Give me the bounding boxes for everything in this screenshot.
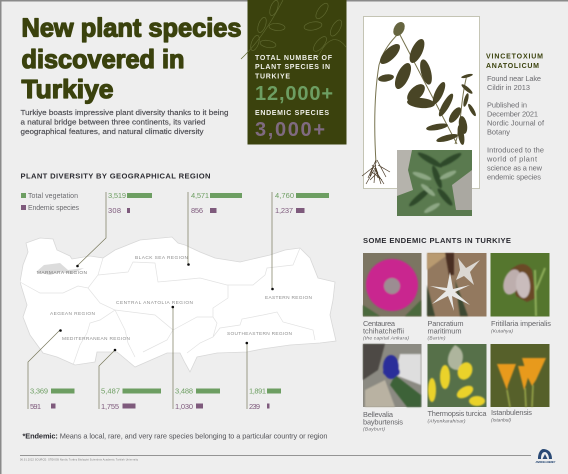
species facts bbox=[486, 74, 545, 182]
caption: Bellevalia bbox=[363, 410, 403, 432]
species facts: Nordic Journal of bbox=[487, 118, 545, 128]
bars: Marmara: 308 bbox=[108, 206, 121, 215]
stat: endemic species: 3,000+ bbox=[255, 119, 325, 141]
stat: total species: 12,000+ bbox=[255, 83, 333, 105]
caption: Istanbulensis bbox=[491, 408, 532, 424]
species facts: Found near Lake bbox=[487, 74, 541, 83]
Marmara sea bbox=[36, 263, 84, 275]
region labels: BLACK SEA REGION bbox=[135, 255, 189, 261]
bars: Mediterranean: 1,755 bbox=[101, 402, 119, 411]
region labels: MEDITERRANEAN REGION bbox=[62, 336, 131, 342]
bars: Southeastern: 1,891 bbox=[249, 386, 266, 396]
caption: Thermopsis: Thermopsis turcica bbox=[428, 409, 487, 418]
caption: Thermopsis: (Afyonkarahisar) bbox=[428, 418, 466, 424]
bars: Mediterranean: 5,487 bbox=[101, 386, 120, 396]
species name: ANATOLICUM bbox=[486, 63, 539, 70]
bars: Aegean bbox=[30, 386, 74, 411]
title bbox=[22, 12, 242, 104]
region labels: CENTRAL ANATOLIA REGION bbox=[116, 300, 194, 306]
region labels bbox=[37, 255, 313, 342]
title: discovered in bbox=[22, 44, 184, 74]
caption: Bellevalia: (Bayburt) bbox=[363, 426, 385, 432]
heading: endemic plants: SOME ENDEMIC PLANTS IN TURKIYE bbox=[363, 236, 511, 245]
heading: plant diversity: PLANT DIVERSITY BY GEOGRAPHICAL REGION bbox=[20, 172, 210, 180]
caption: Pancratium: (Bartin) bbox=[428, 336, 446, 342]
caption: Centaurea bbox=[363, 319, 409, 342]
bars: Aegean: 3,369 bbox=[30, 386, 48, 396]
caption: Centaurea: tchihatcheffii bbox=[363, 326, 404, 336]
icon: leaf branches bbox=[241, 0, 346, 59]
caption: Pancratium bbox=[428, 319, 464, 342]
species facts: Published in bbox=[487, 100, 527, 110]
bars: Eastern: 1,237 bbox=[275, 206, 293, 215]
bars: Black Sea: 4,571 bbox=[191, 191, 209, 200]
icon: agency logo: ANADOLU AGENCY bbox=[536, 460, 556, 464]
caption: Fritillaria bbox=[491, 319, 551, 334]
caption: Fritillaria: Fritillaria imperialis bbox=[491, 319, 551, 328]
legend: Total vegetation bbox=[28, 193, 78, 200]
icon: agency logo bbox=[536, 449, 556, 464]
bars: Eastern: 4,760 bbox=[275, 191, 294, 200]
intro text: geographical features, and natural climatic diversity bbox=[20, 127, 204, 136]
specimen plant bbox=[362, 20, 477, 184]
caption: Thermopsis bbox=[428, 409, 487, 424]
intro text: Turkiye boasts impressive plant diversity thanks to it being bbox=[20, 108, 228, 117]
bars: Southeastern bbox=[249, 386, 281, 411]
stat: total species: PLANT SPECIES IN bbox=[255, 64, 330, 71]
species name bbox=[486, 54, 543, 70]
species facts: December 2021 bbox=[487, 110, 538, 118]
legend: Endemic species bbox=[28, 205, 80, 212]
intro text bbox=[20, 108, 228, 136]
species facts: endemic species bbox=[487, 172, 541, 182]
photo: Fritillaria bbox=[490, 253, 550, 316]
footnote: *Endemic: Means a local, rare, and very rare species belonging to a particular country or region bbox=[22, 432, 328, 440]
bars: Aegean: 591 bbox=[30, 402, 41, 411]
source text: 06.01.2022 SOURCE: STEKOB Nordic Turkey Biologist Scientists Academic Turkish University bbox=[20, 458, 139, 462]
bars: Central Anatolia: 1,030 bbox=[175, 402, 193, 411]
species facts: Introduced to the bbox=[487, 146, 544, 154]
photo: Bellevalia bbox=[363, 344, 422, 407]
region labels: AEGEAN REGION bbox=[50, 311, 96, 317]
region labels: SOUTHEASTERN REGION bbox=[227, 331, 293, 337]
bars: Central Anatolia: 3,488 bbox=[175, 386, 193, 396]
leader lines and dots bbox=[28, 192, 274, 409]
caption: Bellevalia: Bellevalia bbox=[363, 410, 394, 419]
species facts: world of plant bbox=[486, 154, 537, 164]
species facts: science as a new bbox=[487, 164, 543, 172]
bars: Central Anatolia bbox=[175, 386, 220, 411]
stats panel bbox=[241, 0, 346, 145]
caption: Pancratium: Pancratium bbox=[428, 319, 464, 328]
region labels: EASTERN REGION bbox=[265, 295, 313, 301]
caption: Centaurea: Centaurea bbox=[363, 319, 396, 328]
bars: Eastern bbox=[275, 191, 329, 215]
caption: Pancratium: maritimum bbox=[428, 326, 462, 336]
caption: Centaurea: (the capital Ankara) bbox=[363, 336, 409, 342]
bars: Marmara: 3,519 bbox=[108, 191, 126, 200]
bars: Southeastern: 239 bbox=[249, 402, 260, 411]
map: regions of Turkiye bbox=[20, 237, 336, 372]
stat: endemic species: ENDEMIC SPECIES bbox=[255, 110, 329, 117]
bars: Marmara bbox=[108, 191, 152, 215]
caption: Fritillaria: (Kutahya) bbox=[491, 328, 513, 334]
stat: total species bbox=[255, 55, 333, 105]
region labels: MARMARA REGION bbox=[37, 270, 88, 276]
caption: Istanbulensis: Istanbulensis bbox=[491, 408, 532, 417]
species facts: Botany bbox=[487, 128, 510, 136]
legend bbox=[21, 193, 80, 212]
stat: total species: TURKIYE bbox=[255, 74, 290, 80]
stat: total species: TOTAL NUMBER OF bbox=[255, 55, 333, 62]
specimen photo bbox=[397, 150, 472, 216]
panel: vincetoxicum specimen bbox=[362, 16, 545, 216]
caption: Bellevalia: bayburtensis bbox=[363, 418, 403, 426]
species facts: Cildir in 2013 bbox=[487, 83, 530, 92]
bars: Black Sea: 856 bbox=[191, 206, 203, 215]
caption: Istanbulensis: (Istanbul) bbox=[491, 418, 511, 424]
title: New plant species bbox=[22, 12, 242, 42]
stat: endemic species bbox=[255, 110, 329, 141]
photo: Centaurea bbox=[363, 253, 422, 316]
footer line bbox=[20, 454, 531, 457]
title: Turkiye bbox=[22, 74, 114, 104]
bars: Black Sea bbox=[191, 191, 242, 215]
photo: Thermopsis bbox=[428, 344, 486, 407]
species name: VINCETOXIUM bbox=[486, 54, 543, 60]
intro text: a natural bridge between three continents, its varied bbox=[20, 118, 206, 126]
bars: Mediterranean bbox=[101, 386, 161, 411]
photo: Pancratium bbox=[427, 253, 486, 316]
photo: Istanbulensis bbox=[490, 344, 550, 407]
